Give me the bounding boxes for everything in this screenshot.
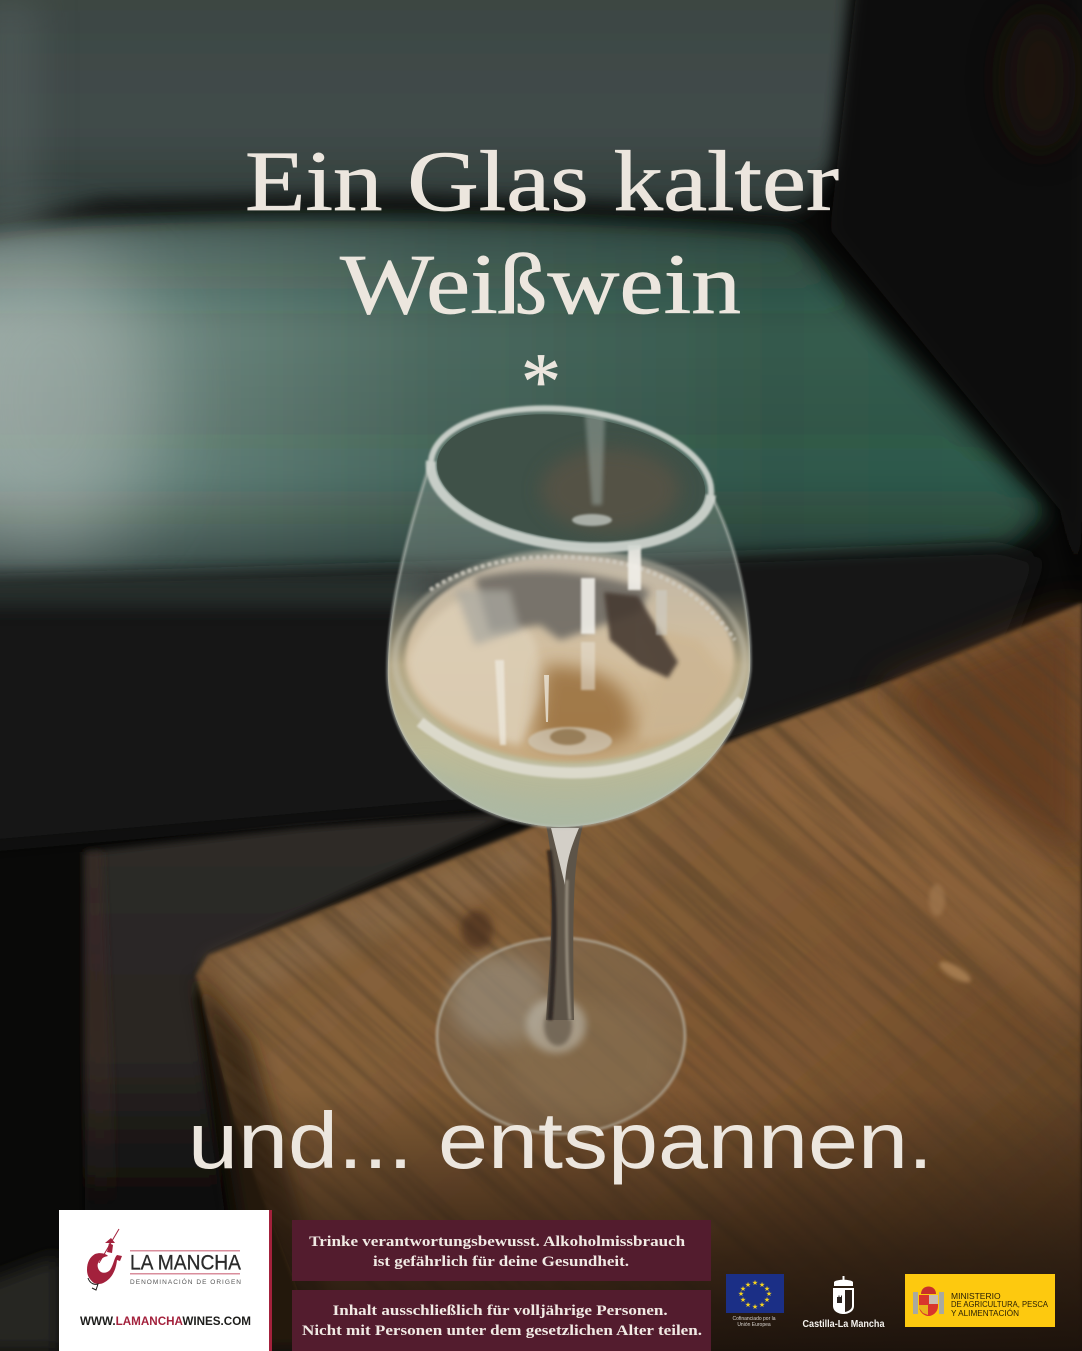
title: Ein Glas kalter	[245, 133, 839, 229]
title	[245, 133, 839, 426]
glass bowl	[380, 400, 760, 840]
logo: European Union: Cofinanciado por la	[732, 1316, 776, 1322]
logo: European Union	[726, 1274, 784, 1328]
upper glass interior	[436, 414, 706, 542]
logo: Spanish ministry: Y ALIMENTACIÓN	[951, 1308, 1019, 1318]
logo: European Union: ★	[764, 1285, 770, 1293]
logo: European Union: ★	[766, 1290, 772, 1298]
logo: European Union: ★	[745, 1301, 751, 1309]
logo: European Union: ★	[745, 1281, 751, 1289]
notice: adults only	[292, 1290, 711, 1351]
bowl outline	[388, 461, 750, 827]
seat front shadow	[0, 548, 1040, 850]
lower chair	[85, 812, 520, 1215]
title: Weißwein	[340, 236, 741, 332]
glass foot	[437, 938, 685, 1134]
logo: Spanish ministry: MINISTERIO	[951, 1291, 1001, 1301]
wine glass	[380, 400, 760, 1134]
lower wine body	[388, 596, 750, 827]
icon: coat of arms	[913, 1286, 944, 1316]
logo: Castilla-La Mancha	[802, 1276, 885, 1330]
logo: European Union: ★	[740, 1285, 746, 1293]
tagline: und... entspannen.	[188, 1096, 933, 1185]
logo: European Union: ★	[764, 1296, 770, 1304]
notice: adults only: Inhalt ausschließlich für volljährige Personen.	[333, 1303, 668, 1319]
logo: Spanish ministry	[905, 1274, 1055, 1327]
wine surface	[406, 554, 734, 762]
logo: European Union: ★	[759, 1301, 765, 1309]
bubble cluster	[528, 727, 612, 755]
table top	[196, 603, 1082, 1351]
chair backrest	[0, 0, 858, 240]
logo wordmark: LA MANCHA	[130, 1252, 241, 1274]
logo wordmark	[130, 1250, 241, 1286]
foam and reflection	[475, 571, 650, 640]
logo: European Union: ★	[740, 1296, 746, 1304]
notice: responsible drinking	[292, 1220, 711, 1281]
chair seat	[0, 221, 1046, 590]
logo: European Union: ★	[738, 1290, 744, 1298]
notice: responsible drinking: ist gefährlich für deine Gesundheit.	[373, 1254, 629, 1270]
notice: adults only: Nicht mit Personen unter dem gesetzlichen Alter teilen.	[302, 1323, 702, 1339]
logo: Castilla-La Mancha: Castilla-La Mancha	[802, 1318, 885, 1330]
website link: WWW.LAMANCHAWINES.COM	[80, 1316, 251, 1328]
logo: European Union: Unión Europea	[737, 1322, 771, 1328]
glass stem	[546, 825, 583, 1020]
logo panel: La Mancha	[59, 1210, 272, 1351]
notice: responsible drinking: Trinke verantwortungsbewusst. Alkoholmissbrauch	[309, 1234, 686, 1250]
logo: Spanish ministry: DE AGRICULTURA, PESCA	[951, 1299, 1048, 1309]
title: *	[521, 338, 561, 426]
logo: European Union: ★	[752, 1279, 758, 1287]
icon: knight on horse	[87, 1229, 122, 1290]
logo: European Union: ★	[752, 1303, 758, 1311]
glass rim	[431, 408, 711, 548]
logo wordmark: DENOMINACIÓN DE ORIGEN	[130, 1277, 241, 1286]
dark right corner	[830, 0, 1082, 610]
surface rim white	[420, 700, 742, 773]
wood grain	[196, 603, 1082, 1351]
logo: European Union: ★	[759, 1281, 765, 1289]
vertical highlights	[581, 578, 595, 634]
